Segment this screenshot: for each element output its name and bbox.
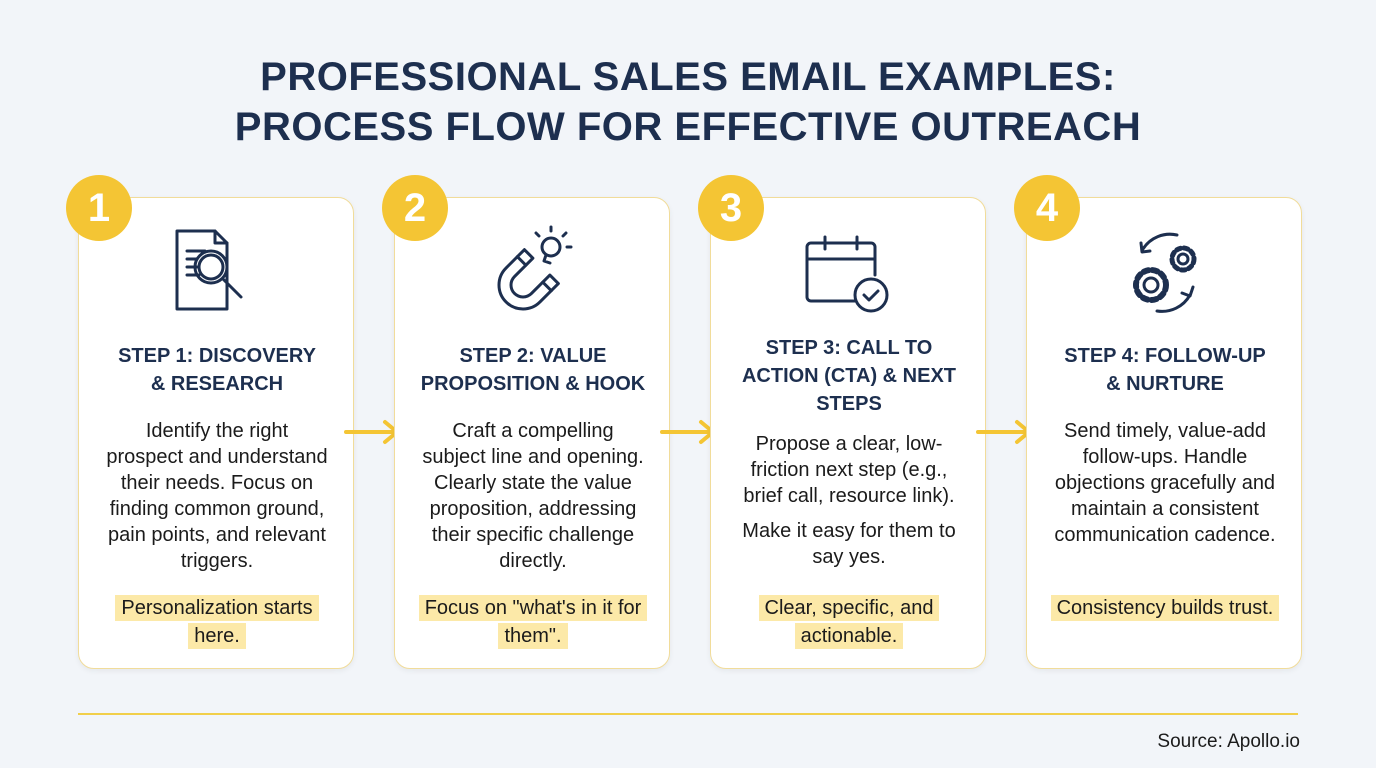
heading [1064,345,1266,395]
text: communication cadence. [1054,524,1276,546]
callout: them". [504,625,562,647]
icon: gears cycle [1133,232,1196,313]
icon: magnet and lightbulb [498,226,572,310]
text: Send timely, value-add [1064,420,1266,442]
text: finding common ground, [110,498,324,520]
text [106,420,328,572]
panel: step 1 [78,197,354,669]
text: Identify the right [146,420,288,442]
panel: step 2 [394,197,670,669]
title: PROFESSIONAL SALES EMAIL EXAMPLES: [260,55,1116,99]
text [1054,420,1276,546]
badge 2 [382,175,448,241]
icon: document search [176,230,243,310]
heading: STEP 4: FOLLOW-UP [1064,345,1266,367]
heading: STEP 1: DISCOVERY [118,345,316,367]
callout: here. [194,625,240,647]
panel: step 3 [710,197,986,669]
badge 3 [698,175,764,241]
callout: Clear, specific, and [764,597,933,619]
text: Propose a clear, low- [756,433,942,455]
heading: & RESEARCH [151,373,283,395]
callout [759,595,939,649]
callout: Consistency builds trust. [1057,597,1273,619]
heading [421,345,645,395]
arrow 2 [660,420,710,444]
heading [118,345,316,395]
arrow 1 [344,420,394,444]
badge 2: 2 [404,186,426,230]
heading: PROPOSITION & HOOK [421,373,645,395]
text: their specific challenge [432,524,634,546]
heading: STEPS [816,393,882,415]
callout: Personalization starts [121,597,313,619]
text: subject line and opening. [422,446,644,468]
heading: ACTION (CTA) & NEXT [742,365,956,387]
badge 3: 3 [720,186,742,230]
heading: & NURTURE [1106,373,1224,395]
callout: actionable. [801,625,897,647]
text [743,433,955,507]
heading: STEP 2: VALUE [459,345,607,367]
text: follow-ups. Handle [1083,446,1247,468]
text: brief call, resource link). [743,485,955,507]
heading: STEP 3: CALL TO [766,337,932,359]
callout [419,595,647,649]
heading [742,337,956,415]
text: prospect and understand [106,446,328,468]
text [422,420,644,572]
text: maintain a consistent [1071,498,1259,520]
badge 1: 1 [88,186,110,230]
source: Source: Apollo.io [1157,731,1300,752]
panel: step 4 [1026,197,1302,669]
badge 4: 4 [1036,186,1058,230]
text: pain points, and relevant [108,524,326,546]
callout: Focus on "what's in it for [425,597,641,619]
text: their needs. Focus on [121,472,313,494]
title [235,55,1141,149]
icon: calendar check [806,236,888,312]
text: friction next step (e.g., [751,459,947,481]
arrow 3 [976,420,1026,444]
text: directly. [499,550,567,572]
text: triggers. [181,550,253,572]
text: say yes. [812,546,886,568]
badge 1 [66,175,132,241]
title: PROCESS FLOW FOR EFFECTIVE OUTREACH [235,105,1141,149]
text: Make it easy for them to [742,520,956,542]
text: Craft a compelling [452,420,614,442]
text: Clearly state the value [434,472,632,494]
callout [115,595,319,649]
text: proposition, addressing [430,498,636,520]
text: objections gracefully and [1055,472,1275,494]
text [742,520,956,568]
badge 4 [1014,175,1080,241]
